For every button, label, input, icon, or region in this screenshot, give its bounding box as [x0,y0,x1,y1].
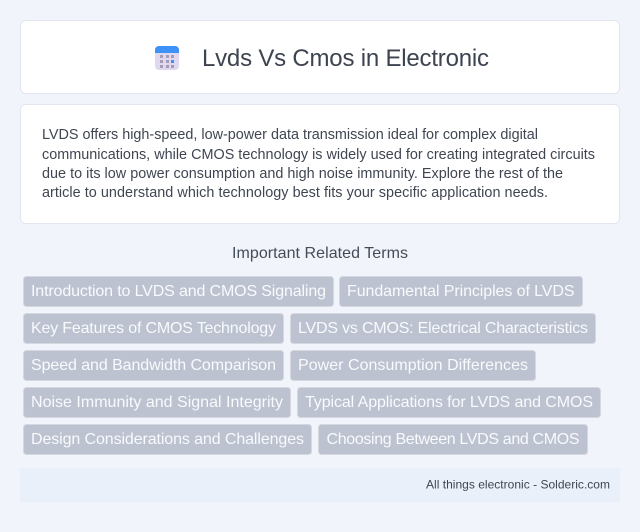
title: Lvds Vs Cmos in Electronic [202,45,489,72]
header panel [20,20,620,94]
tag: CMOS features [24,314,284,344]
intro text panel [20,104,620,224]
intro paragraph [42,127,595,201]
tag: choosing: Choosing Between LVDS and CMOS [326,431,580,448]
tag: design considerations: Design Considerations and Challenges [31,431,304,448]
tag: electrical characteristics: LVDS vs CMOS: Electrical Characteristics [298,320,588,337]
tag: fundamentals: Fundamental Principles of LVDS [347,283,574,300]
tag: speed and bandwidth: Speed and Bandwidth Comparison [31,357,276,374]
tag: choosing [318,424,588,454]
tag: fundamentals [340,276,582,306]
intro paragraph: article to understand which technology best fits your specific application needs. [42,185,548,201]
tag: CMOS features: Key Features of CMOS Technology [31,320,276,337]
tag: electrical characteristics [290,314,596,344]
tag: applications: Typical Applications for LVDS and CMOS [305,394,593,411]
intro paragraph: communications, while CMOS technology is widely used for creating integrated circuits [42,147,595,163]
related terms tag list [24,276,600,454]
tag: noise immunity [24,388,290,418]
intro paragraph: LVDS offers high-speed, low-power data transmission ideal for complex digital [42,127,538,143]
tag: power consumption [290,350,536,380]
intro paragraph: due to its low power consumption and high noise immunity. Explore the rest of the [42,166,563,182]
icon: calendar grid [155,46,179,70]
tag: introduction: Introduction to LVDS and CMOS Signaling [31,283,326,300]
tag: power consumption: Power Consumption Differences [298,357,528,374]
tag: applications [298,388,600,418]
tag: noise immunity: Noise Immunity and Signal Integrity [31,394,283,411]
related terms heading: Important Related Terms [232,245,408,262]
footer credit: All things electronic - Solderic.com [426,478,610,492]
tag: design considerations [24,424,312,454]
footer bar [20,468,620,502]
tag: speed and bandwidth [24,350,284,380]
tag: introduction [24,276,334,306]
